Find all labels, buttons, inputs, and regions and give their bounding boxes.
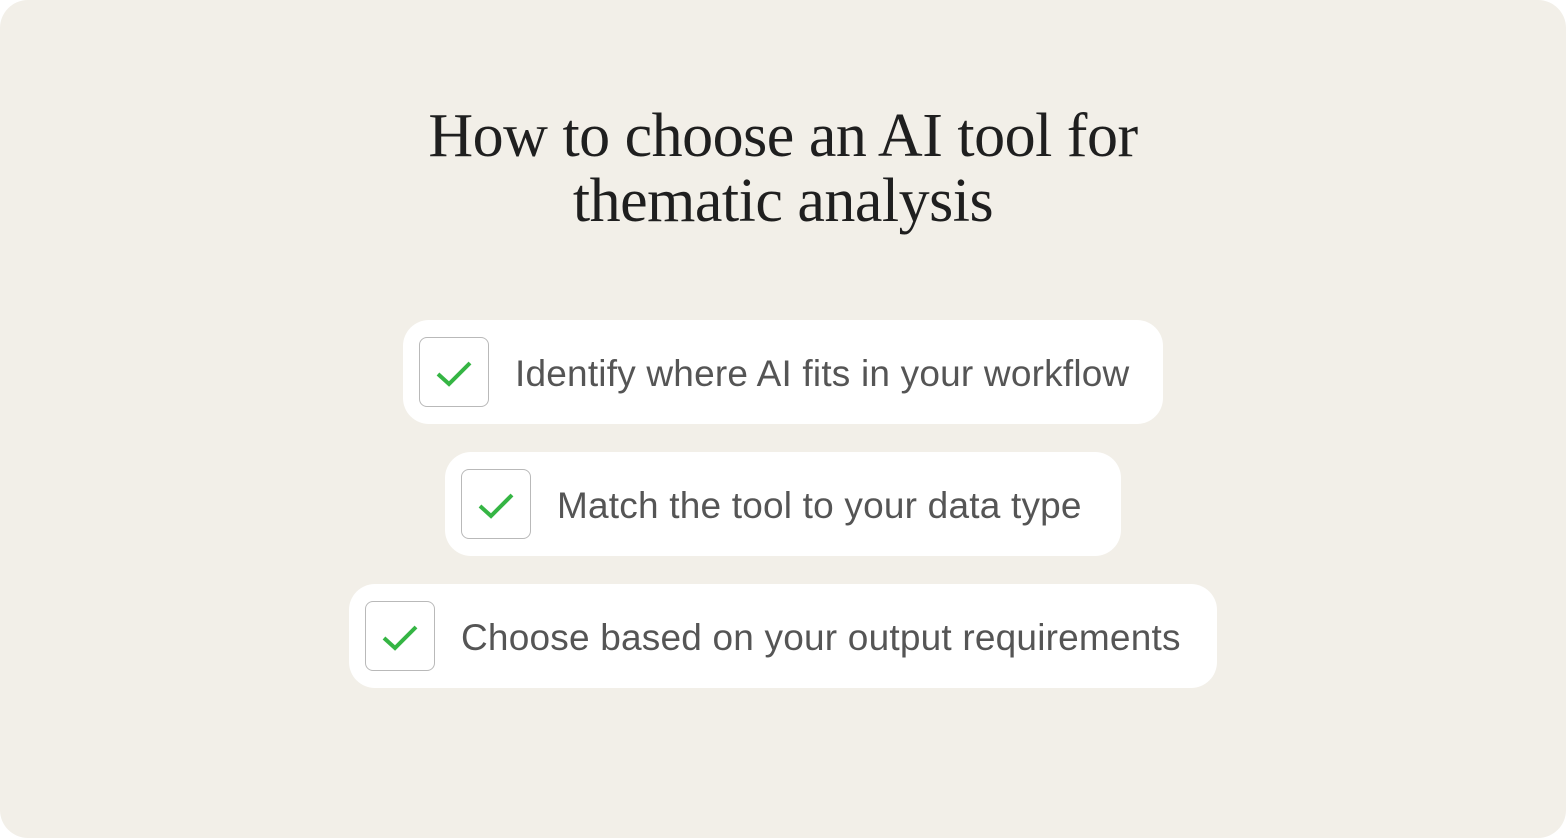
text: item 1: Identify where AI fits in your workflow — [515, 353, 1129, 394]
item 2 — [445, 452, 1121, 556]
icon: checkbox — [365, 601, 435, 671]
item 1 — [403, 320, 1163, 424]
text: item 2: Match the tool to your data type — [557, 485, 1082, 526]
icon: checkbox — [419, 337, 489, 407]
text: item 3: Choose based on your output requirements — [461, 617, 1181, 658]
title — [428, 102, 1138, 235]
title: How to choose an AI tool for — [428, 102, 1138, 170]
icon: checkbox — [461, 469, 531, 539]
title: thematic analysis — [573, 167, 993, 235]
item 3 — [349, 584, 1217, 688]
